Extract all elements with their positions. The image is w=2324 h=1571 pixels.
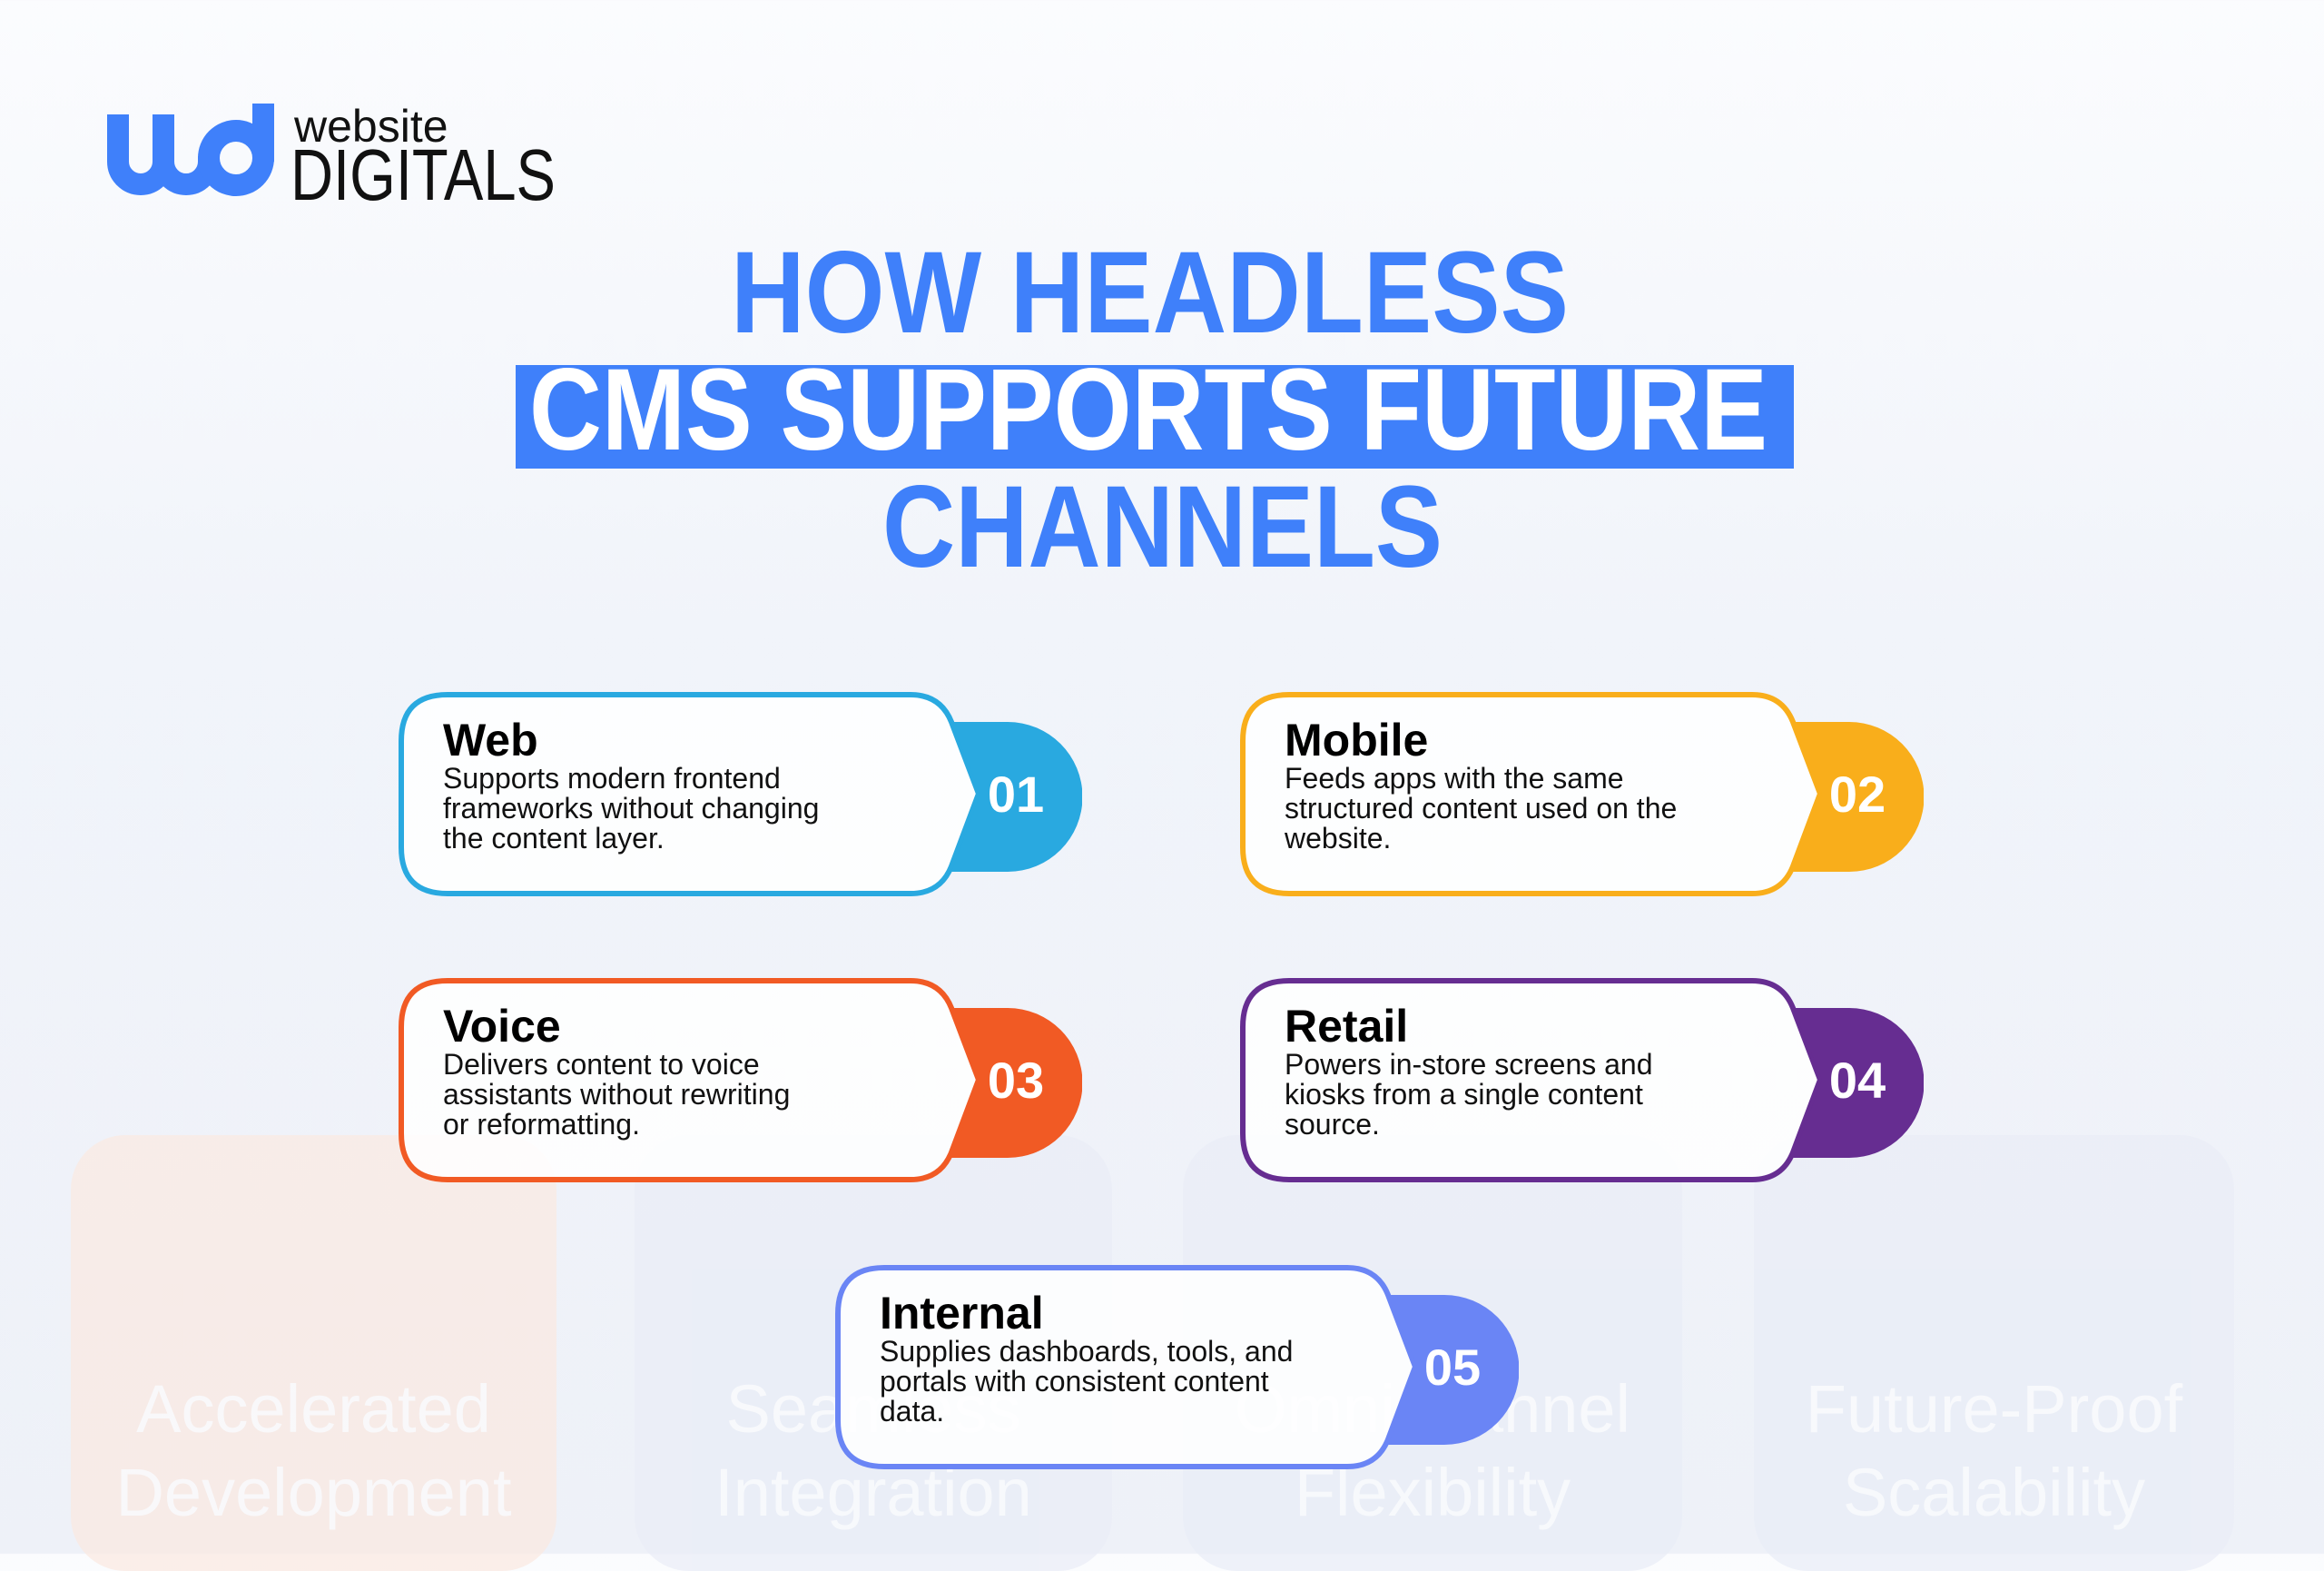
card: Voice 03 bbox=[399, 978, 1082, 1182]
background decorative tiles: Omnichannel bbox=[1235, 1371, 1630, 1447]
background decorative tiles: Flexibility bbox=[1295, 1455, 1571, 1530]
card: Mobile 02: 02 bbox=[1829, 766, 1886, 823]
card: Retail 04 bbox=[1240, 978, 1924, 1182]
card: Retail 04: Powers in-store screens and bbox=[1285, 1048, 1653, 1081]
card: Web 01: the content layer. bbox=[443, 822, 665, 855]
title bbox=[516, 245, 1794, 581]
card: Internal 05: data. bbox=[880, 1395, 944, 1428]
card: Internal 05: Supplies dashboards, tools, and bbox=[880, 1335, 1293, 1368]
logo bbox=[107, 102, 556, 206]
card: Web 01: Supports modern frontend bbox=[443, 762, 781, 795]
background decorative tiles: Integration bbox=[714, 1455, 1032, 1530]
card: Mobile 02: Feeds apps with the same bbox=[1285, 762, 1624, 795]
card: Voice 03: 03 bbox=[988, 1052, 1044, 1109]
card: Internal 05 bbox=[835, 1265, 1519, 1469]
background decorative tiles: Development bbox=[115, 1455, 512, 1530]
logo text bbox=[290, 101, 556, 215]
card: Retail 04: kiosks from a single content bbox=[1285, 1078, 1643, 1111]
card: Web 01: Web bbox=[443, 715, 538, 766]
card: Retail 04: source. bbox=[1285, 1108, 1380, 1141]
card: Web 01 bbox=[399, 692, 1082, 896]
background decorative tiles: Seamless bbox=[726, 1371, 1020, 1447]
card: Mobile 02: website. bbox=[1284, 822, 1391, 855]
card: Internal 05: Internal bbox=[880, 1288, 1044, 1339]
card: Internal 05: 05 bbox=[1424, 1339, 1481, 1396]
card: Web 01: frameworks without changing bbox=[443, 792, 819, 825]
card: Mobile 02: structured content used on the bbox=[1285, 792, 1677, 825]
background decorative tiles: Future-Proof bbox=[1806, 1371, 2182, 1447]
card: Retail 04: 04 bbox=[1829, 1052, 1886, 1109]
card: Voice 03: assistants without rewriting bbox=[443, 1078, 790, 1111]
card: Retail 04: Retail bbox=[1285, 1001, 1408, 1052]
logo text: website bbox=[293, 102, 448, 152]
card: Web 01: 01 bbox=[988, 766, 1044, 823]
card: Internal 05: portals with consistent content bbox=[880, 1365, 1269, 1398]
background decorative tiles: Accelerated bbox=[136, 1371, 491, 1447]
card: Voice 03: Voice bbox=[443, 1001, 561, 1052]
background decorative tiles: Scalability bbox=[1843, 1455, 2145, 1530]
card: Mobile 02 bbox=[1240, 692, 1924, 896]
card: Mobile 02: Mobile bbox=[1285, 715, 1428, 766]
card: Voice 03: Delivers content to voice bbox=[443, 1048, 760, 1081]
icon: wd mark bbox=[118, 104, 263, 185]
card: Voice 03: or reformatting. bbox=[443, 1108, 640, 1141]
